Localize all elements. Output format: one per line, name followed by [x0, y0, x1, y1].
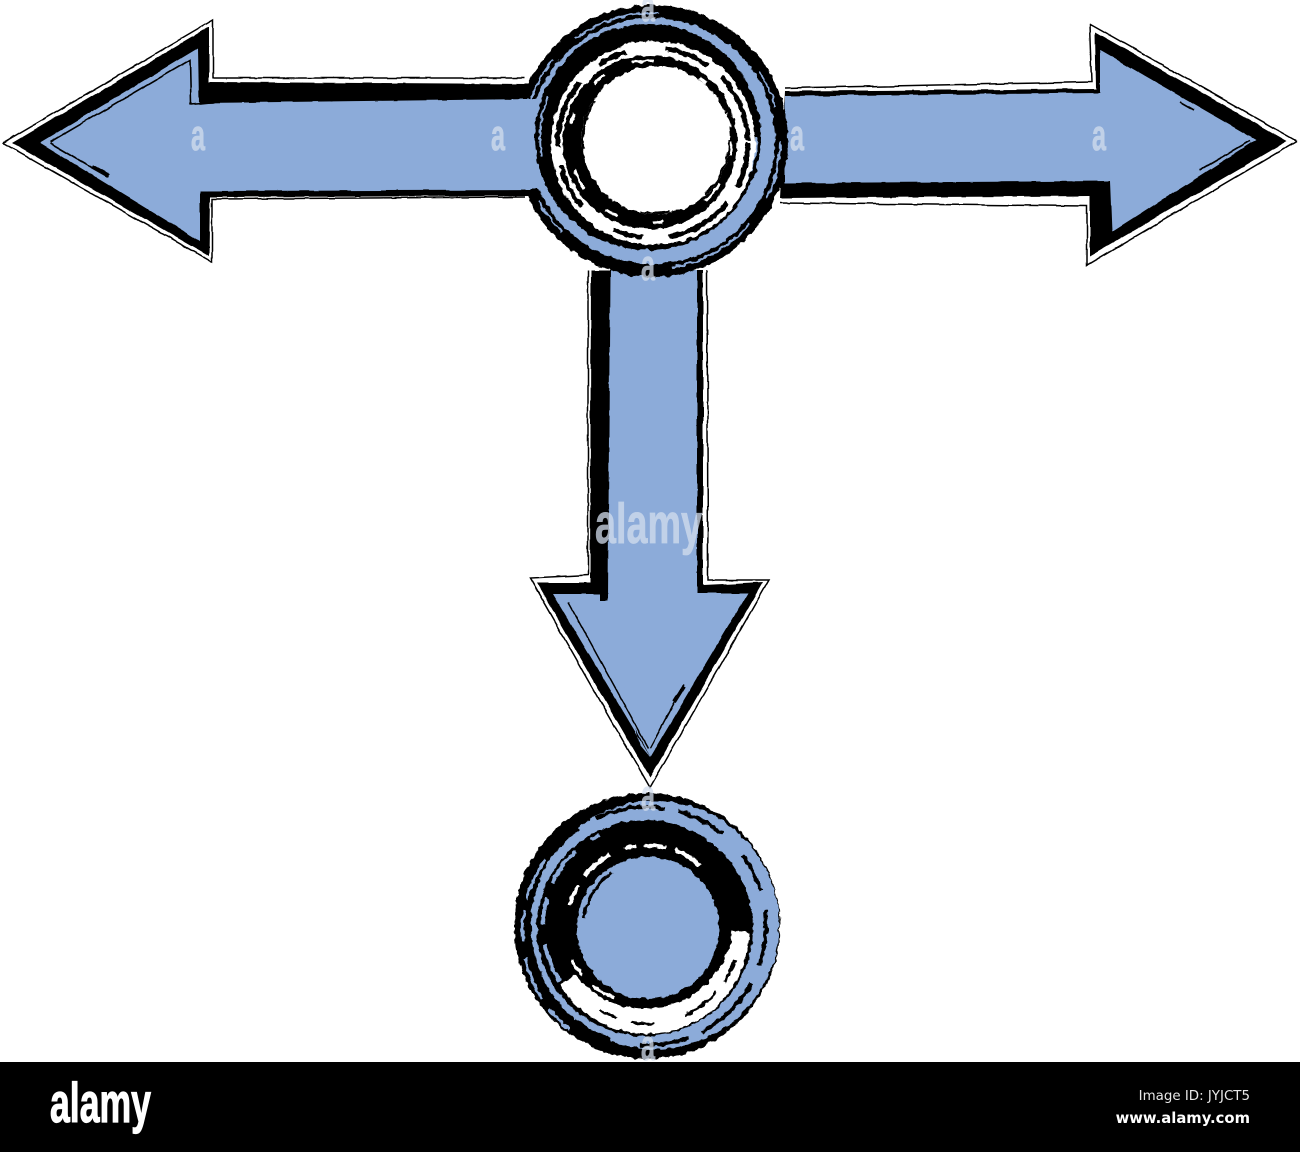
- outer ring: [516, 5, 788, 277]
- watermark: alamy: [595, 492, 702, 556]
- footer logo: alamy: [50, 1071, 151, 1134]
- watermark: a: [790, 111, 804, 160]
- website: www.alamy.com: [1116, 1110, 1250, 1127]
- watermark: a: [191, 111, 205, 160]
- inner band: [557, 833, 733, 1009]
- white centre: [582, 66, 730, 214]
- watermark: [191, 0, 1106, 1070]
- inner band: [563, 55, 737, 229]
- arrow pointing right: [780, 24, 1297, 265]
- blue centre: [577, 857, 719, 999]
- arrow pointing left: [3, 20, 535, 262]
- watermark: a: [1092, 111, 1106, 160]
- middle band: [537, 820, 753, 1036]
- white crescent: [560, 925, 749, 1034]
- target circle at bottom: [514, 793, 780, 1059]
- white ring: [551, 41, 755, 245]
- footer bar: [0, 1062, 1300, 1152]
- watermark: a: [491, 111, 505, 160]
- watermark: a: [641, 1021, 655, 1070]
- middle band: [535, 24, 761, 250]
- junction ring with white centre: [512, 5, 788, 277]
- arrow pointing down: [530, 270, 769, 788]
- blue streaks on the left: [528, 807, 766, 1045]
- shaft joint: [512, 99, 552, 189]
- watermark: a: [641, 771, 655, 820]
- watermark: a: [641, 241, 655, 290]
- image id: Image ID: JYJCT5: [1139, 1089, 1250, 1104]
